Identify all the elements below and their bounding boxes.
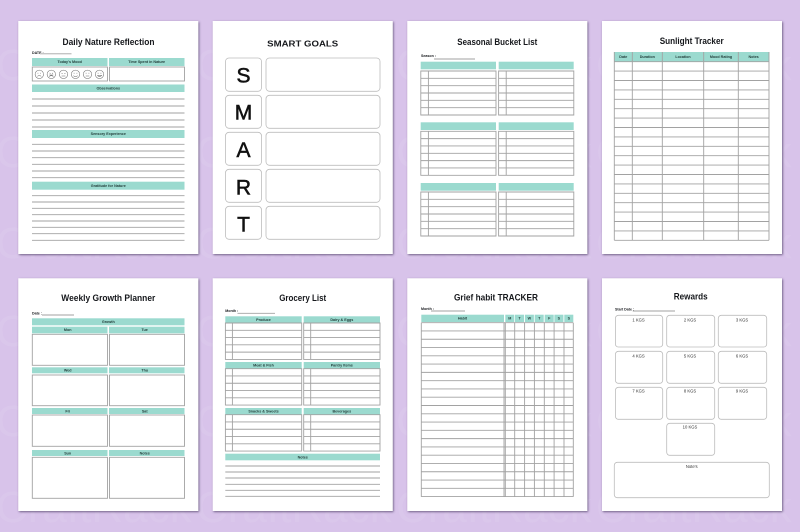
month field: Month : [421,307,434,311]
header: weekdays: T [538,317,541,321]
watermark: CraftRack [596,41,793,90]
title: Weekly Growth Planner: Weekly Growth Planner [61,293,156,304]
day: Sun [32,450,108,498]
table header: Mood Rating [710,55,732,59]
table header: Notes [748,55,759,59]
panel: Grocery List [213,278,393,511]
panel: Seasonal Bucket List [407,21,587,254]
row T: T [237,213,250,236]
watermark: CraftRack [396,483,593,532]
section: Notes [109,450,184,498]
watermark: CraftRack [596,397,793,446]
day: Thu [109,367,184,406]
header: Habit [421,315,504,322]
day: Wed: Wed [64,369,72,373]
header: weekdays [505,315,573,322]
panel: Grief habit TRACKER [407,278,587,511]
title: Seasonal Bucket List: Seasonal Bucket List [457,37,538,48]
reward: 8 KGS [667,387,715,419]
header: weekdays: W [528,317,532,321]
watermark: CraftRack [196,219,393,268]
date field: DATE : [32,51,44,55]
band: Observations: Observations [97,86,120,90]
header: Time Spent in Nature: Time Spent in Nature [128,60,165,64]
reward: 7 KGS: 7 KGS [632,389,645,394]
reward: 7 KGS [615,387,663,419]
day: Thu: Thu [141,369,149,373]
reward: 1 KGS [615,315,663,347]
band: Notes [225,454,380,460]
date field: Date : [32,312,42,316]
band: Growth: Growth [102,320,115,324]
watermark: CraftRack [596,128,793,177]
day: Sat: Sat [142,409,148,413]
reward: 3 KGS: 3 KGS [736,317,748,322]
watermark: CraftRack [0,483,193,532]
reward: 5 KGS [667,351,715,383]
list: Produce: Produce [256,318,271,322]
day: Wed [32,367,108,406]
watermark: CraftRack [396,41,593,90]
band: Gratitude for Nature: Gratitude for Nature [91,184,126,188]
title: Sunlight Tracker: Sunlight Tracker [660,36,724,47]
watermark: CraftRack [0,397,193,446]
season field [421,54,475,59]
day: Mon: Mon [64,328,72,332]
reward: 4 KGS: 4 KGS [632,354,645,359]
row M: M [235,102,252,125]
watermark: CraftRack [196,307,393,356]
list: Snacks and Sweets: Snacks & Sweets [248,410,279,414]
row A: A [236,139,251,162]
list block: bottom right [499,183,574,236]
reward: 2 KGS: 2 KGS [684,317,696,322]
band: Sensory Experience [32,130,184,138]
reward: 9 KGS: 9 KGS [736,389,748,394]
list: Pantry Items: Pantry Items [331,364,353,368]
reward: 6 KGS: 6 KGS [736,354,748,359]
header: weekdays: F [548,317,551,321]
row A [226,132,380,165]
header: Habit: Habit [458,317,468,321]
reward: 9 KGS [718,387,767,419]
mood box with smileys [32,67,107,81]
reward: 8 KGS: 8 KGS [684,389,696,394]
start date field [615,308,675,312]
header: weekdays: T [518,317,521,321]
watermark: CraftRack [596,483,793,532]
reward: 3 KGS [718,315,767,347]
panel: Weekly Growth Planner [18,278,198,511]
list: Beverages [304,408,380,451]
season field: Season : [421,54,436,58]
reward: 2 KGS [667,315,715,347]
list: Beverages: Beverages [332,410,351,414]
list block: bottom left [421,183,496,236]
title: Daily Nature Reflection: Daily Nature Reflection [62,37,155,48]
table header: Date [619,55,627,59]
band: Notes: Notes [298,455,308,459]
month field [421,307,465,311]
header: weekdays: S [568,317,571,321]
watermark: CraftRack [196,41,393,90]
title: SMART GOALS: SMART GOALS [267,38,338,48]
watermark: CraftRack [596,307,793,356]
title: Rewards: Rewards [674,292,708,302]
list: Pantry Items [304,362,380,405]
panel: Daily Nature Reflection [18,21,198,254]
row R: R [236,176,251,199]
band: Sensory Experience: Sensory Experience [91,132,126,136]
writing lines: Observations [32,99,184,127]
notes box [614,462,769,498]
band: Observations [32,84,184,92]
writing lines: Notes [225,466,380,496]
title: Grief habit TRACKER: Grief habit TRACKER [454,293,538,304]
watermark: CraftRack [396,219,593,268]
watermark: CraftRack [396,397,593,446]
panel: SMART Goals [213,21,393,254]
list block: middle right [499,122,574,175]
band: Gratitude for Nature [32,182,184,190]
watermark: CraftRack [196,128,393,177]
watermark: CraftRack [0,307,193,356]
title: Grocery List: Grocery List [279,293,327,304]
month field [225,309,275,313]
row M [226,95,380,128]
header: Today's Mood: Today's Mood [58,60,83,64]
list: Dairy and Eggs [304,316,380,359]
watermark: CraftRack [396,128,593,177]
date field [32,51,72,55]
table header: Location [675,55,691,59]
header: weekdays: S [558,317,561,321]
section: Notes: Notes [140,451,150,455]
header: weekdays: M [508,317,511,321]
list: Dairy and Eggs: Dairy & Eggs [330,318,353,322]
reward: 4 KGS [615,351,663,383]
list: Produce [225,316,302,359]
time spent box [110,67,184,81]
watermark: CraftRack [0,219,193,268]
reward: 1 KGS: 1 KGS [632,317,645,322]
list: Snacks and Sweets [225,408,302,451]
band: Growth [32,318,184,325]
month field: Month : [225,309,238,313]
panel: Rewards [602,278,782,511]
day: Mon [32,327,108,365]
table header [614,52,769,62]
day: Fri: Fri [65,409,70,413]
day: Sun: Sun [64,451,72,455]
day: Tue: Tue [142,328,148,332]
reward: 6 KGS [718,351,767,383]
row R [226,169,380,202]
table grid [614,52,769,240]
reward: 10 KGS: 10 KGS [683,425,698,430]
watermark: CraftRack [0,128,193,177]
watermark: CraftRack [196,397,393,446]
day: Sat [109,408,184,446]
writing lines: Sensory Experience [32,144,184,178]
day: Tue [109,327,184,365]
row S: S [236,64,251,87]
panel: Sunlight Tracker [602,21,782,254]
watermark: CraftRack [196,483,393,532]
watermark: CraftRack [396,307,593,356]
notes box: Note's [686,464,698,469]
list: Meat and Fish [225,362,302,405]
watermark: CraftRack [596,219,793,268]
start date field: Start Date : [615,308,634,312]
reward: 5 KGS: 5 KGS [684,354,696,359]
day: Fri [32,408,108,446]
list: Meat and Fish: Meat & Fish [253,364,275,368]
header: Time Spent in Nature [109,58,184,66]
row T [226,206,380,239]
row S [226,58,380,91]
list block: top left [421,62,496,115]
habit grid [421,323,573,497]
list block: top right [499,62,574,115]
table header: Duration [640,55,656,59]
header: Today's Mood [32,58,108,66]
watermark: CraftRack [0,41,193,90]
writing lines: Gratitude for Nature [32,196,184,240]
reward: 10 KGS [667,423,715,455]
list block: middle left [421,122,496,175]
date field [32,312,74,316]
